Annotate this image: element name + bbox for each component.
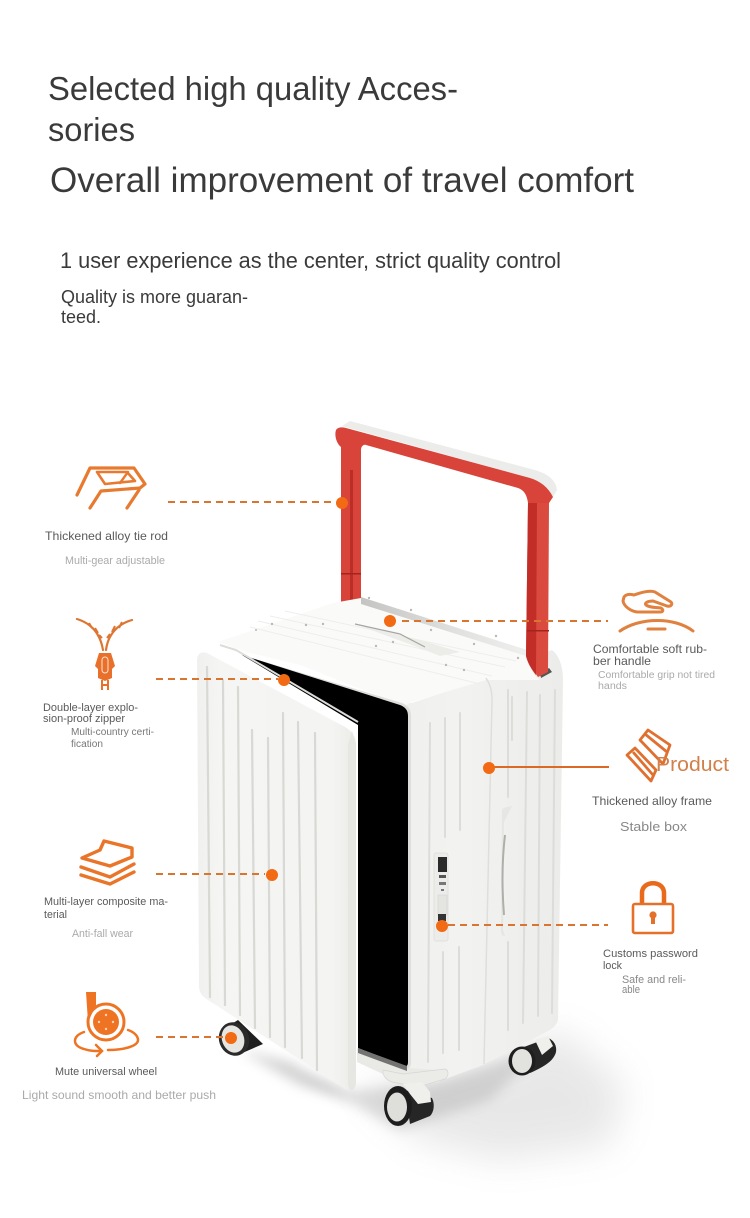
label: composite material: Anti-fall wear	[72, 928, 133, 940]
title: Selected high quality Acces-	[48, 70, 458, 107]
label: zipper: fication	[71, 739, 103, 750]
label: alloy frame: Stable box	[620, 819, 688, 834]
label: zipper: sion-proof zipper	[43, 713, 125, 725]
label: zipper: Double-layer explo-	[43, 702, 138, 714]
label: universal wheel: Mute universal wheel	[55, 1066, 157, 1078]
connector: composite material	[156, 869, 278, 881]
label: soft rubber handle: ber handle	[593, 654, 651, 668]
label: soft rubber handle: Comfortable soft rub-	[593, 642, 707, 656]
label: password lock: Safe and reli-	[622, 974, 686, 986]
handle bar and right post	[335, 421, 557, 678]
label: password lock: able	[622, 984, 640, 996]
label: zipper: Multi-country certi-	[71, 727, 154, 738]
label: universal wheel: Light sound smooth and better push	[22, 1088, 216, 1102]
label: tie rod: Multi-gear adjustable	[65, 555, 165, 567]
case ribs	[428, 690, 555, 1062]
subtitle	[60, 248, 561, 327]
floor shadow	[240, 1030, 625, 1160]
suitcase product photo	[197, 421, 625, 1160]
front swivel wheel	[384, 1082, 434, 1126]
icon: zipper	[77, 619, 132, 690]
label: password lock: lock	[603, 960, 622, 972]
icon: tie rod	[77, 468, 145, 508]
icon: padlock	[633, 883, 673, 933]
icon: composite layers	[81, 841, 134, 884]
label: tie rod: Thickened alloy tie rod	[45, 529, 168, 543]
connector: soft rubber handle	[384, 615, 608, 627]
combination lock	[434, 853, 448, 941]
label: zipper	[43, 702, 154, 750]
left post of handle	[341, 445, 361, 605]
case body	[357, 650, 563, 1087]
label: password lock: Customs password	[603, 948, 698, 960]
label: alloy frame	[592, 794, 712, 834]
label: password lock	[603, 948, 698, 996]
label: soft rubber handle: hands	[598, 681, 627, 692]
connector: password lock	[436, 920, 608, 932]
label: alloy frame: Thickened alloy frame	[592, 794, 712, 808]
door hinge edge	[220, 645, 358, 722]
connector: zipper	[156, 674, 290, 686]
label: tie rod	[45, 529, 168, 567]
side carry handle	[501, 806, 512, 936]
label: soft rubber handle	[593, 642, 715, 692]
rear wheels	[508, 1036, 556, 1076]
black interior	[242, 655, 411, 1071]
icon: universal wheel	[75, 992, 138, 1056]
open front door	[197, 652, 356, 1090]
label: composite material: terial	[44, 909, 67, 921]
connector: alloy tie rod	[168, 497, 348, 509]
connector: alloy frame	[483, 762, 609, 774]
label: soft rubber handle: Comfortable grip not tired	[598, 670, 715, 681]
left front wheel	[214, 1018, 263, 1060]
connector: universal wheel	[156, 1032, 237, 1044]
title	[48, 70, 634, 200]
subtitle: teed.	[61, 307, 101, 327]
label: universal wheel	[22, 1066, 216, 1102]
label: composite material	[44, 896, 168, 940]
product watermark: Product	[656, 754, 729, 776]
icon: hand on handle	[620, 591, 693, 631]
subtitle: Quality is more guaran-	[61, 287, 248, 307]
title: sories	[48, 111, 135, 148]
top lid	[218, 597, 540, 1064]
label: composite material: Multi-layer composite ma-	[44, 896, 168, 908]
subtitle: 1 user experience as the center, strict quality control	[60, 248, 561, 273]
icon: alloy frame	[627, 730, 670, 781]
title: Overall improvement of travel comfort	[50, 161, 634, 200]
